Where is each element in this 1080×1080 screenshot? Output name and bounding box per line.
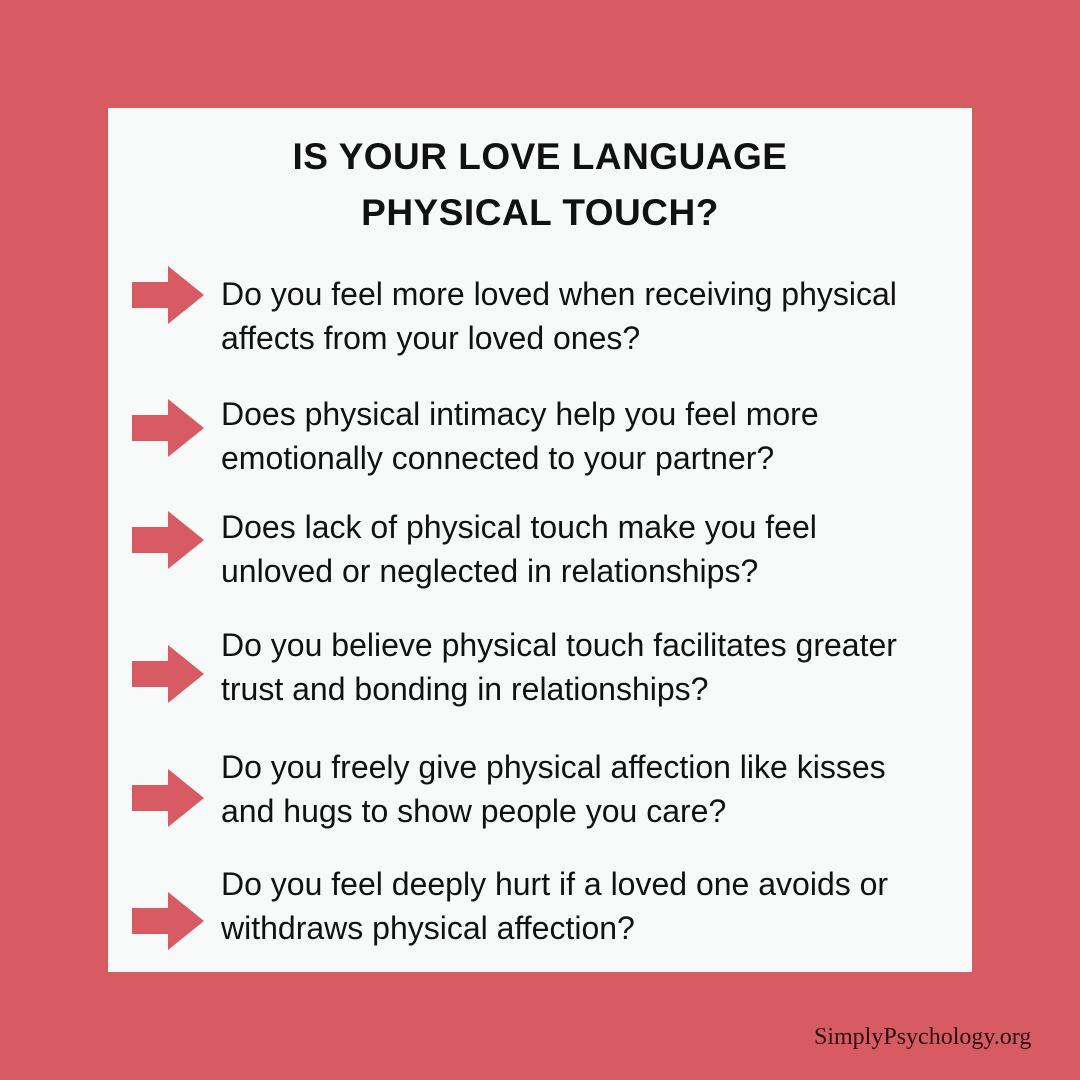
- item 2: [132, 396, 819, 476]
- item 5: and hugs to show people you care?: [221, 793, 726, 829]
- item 6: [132, 866, 888, 950]
- panel: white card: [108, 108, 972, 972]
- item 6: withdraws physical affection?: [221, 910, 635, 946]
- item 4: trust and bonding in relationships?: [221, 671, 708, 707]
- icon: arrow: [132, 645, 204, 703]
- title: [292, 136, 788, 233]
- item 2: emotionally connected to your partner?: [221, 440, 774, 476]
- credit: SimplyPsychology.org: [814, 1024, 1031, 1050]
- item 3: Does lack of physical touch make you feel: [221, 509, 817, 545]
- item 3: unloved or neglected in relationships?: [221, 553, 758, 589]
- item 1: [132, 266, 897, 356]
- title: PHYSICAL TOUCH?: [361, 192, 719, 233]
- icon: arrow: [132, 266, 204, 324]
- item 6: Do you feel deeply hurt if a loved one avoids or: [221, 866, 888, 902]
- title: IS YOUR LOVE LANGUAGE: [292, 136, 788, 177]
- icon: arrow: [132, 769, 204, 827]
- item 1: Do you feel more loved when receiving physical: [221, 276, 897, 312]
- icon: arrow: [132, 892, 204, 950]
- item 2: Does physical intimacy help you feel more: [221, 396, 819, 432]
- item 3: [132, 509, 817, 589]
- item 4: [132, 627, 897, 707]
- item 4: Do you believe physical touch facilitates greater: [221, 627, 897, 663]
- icon: arrow: [132, 511, 204, 569]
- item 5: [132, 749, 886, 829]
- item 5: Do you freely give physical affection like kisses: [221, 749, 886, 785]
- item 1: affects from your loved ones?: [221, 320, 640, 356]
- icon: arrow: [132, 399, 204, 457]
